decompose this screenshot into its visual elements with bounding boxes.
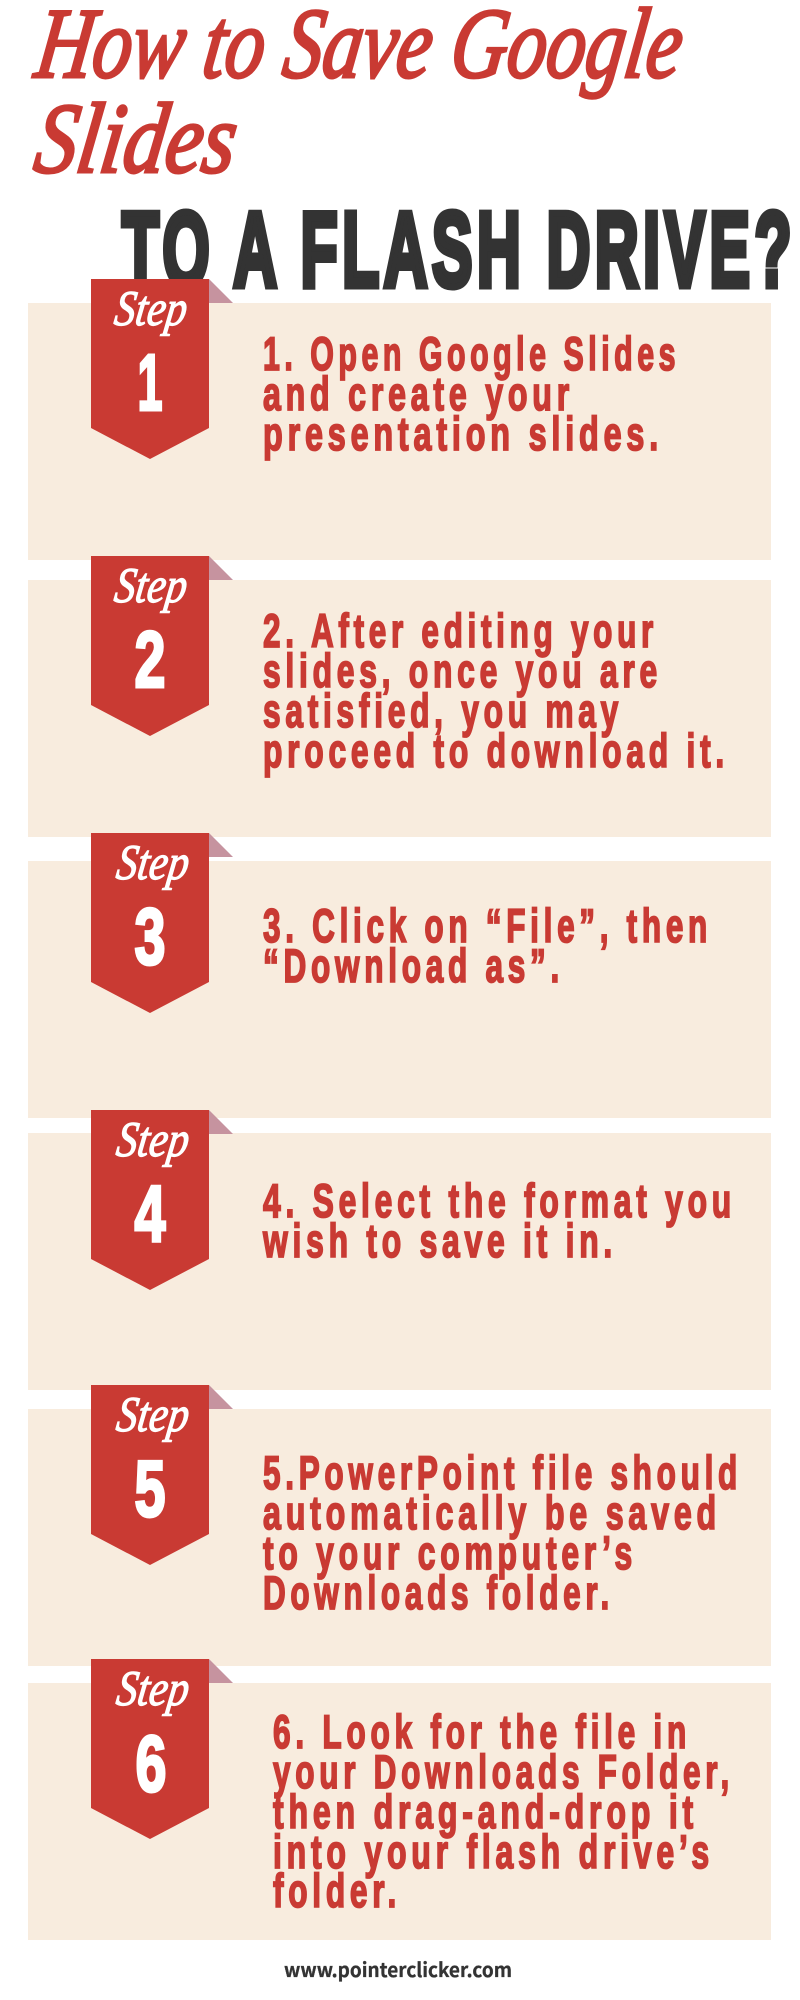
step number: 3	[134, 892, 166, 981]
ribbon fold	[209, 279, 233, 303]
step text	[273, 1705, 734, 1917]
step text	[262, 1174, 736, 1267]
step text	[263, 604, 729, 777]
ribbon	[91, 833, 209, 1013]
panel: step 6	[28, 1659, 771, 1940]
step text: satisfied, you may	[263, 684, 623, 737]
panel background	[28, 1133, 771, 1390]
ribbon label: Step	[111, 280, 191, 336]
ribbon fold	[209, 1659, 233, 1683]
panel background	[28, 861, 771, 1118]
step text: to your computer’s	[263, 1526, 637, 1579]
step number: 4	[134, 1169, 166, 1258]
title	[28, 0, 796, 309]
footer url: www.pointerclicker.com	[284, 1954, 512, 1983]
ribbon label: Step	[113, 1660, 193, 1716]
step text	[263, 899, 712, 992]
title script line 2: Slides	[29, 82, 245, 194]
panel: step 3	[28, 833, 771, 1118]
panel background	[28, 1683, 771, 1940]
panel: step 4	[28, 1110, 771, 1390]
step text: and create your	[263, 367, 574, 420]
step number: 6	[136, 1719, 166, 1808]
panel background	[28, 1409, 771, 1666]
step text: wish to save it in.	[262, 1214, 617, 1267]
panel: step 1	[28, 279, 771, 560]
step number: 5	[134, 1444, 166, 1533]
ribbon label: Step	[113, 834, 193, 890]
panel: step 2	[28, 556, 771, 837]
panel: step 5	[28, 1385, 771, 1666]
ribbon	[91, 279, 209, 459]
ribbon label: Step	[113, 1111, 193, 1167]
step text	[263, 327, 680, 460]
panel background	[28, 580, 771, 837]
ribbon	[91, 1110, 209, 1290]
step text: “Download as”.	[263, 939, 564, 992]
step text: Downloads folder.	[263, 1566, 614, 1619]
ribbon fold	[209, 1385, 233, 1409]
step number: 2	[134, 615, 166, 704]
step number: 1	[138, 338, 162, 427]
ribbon label: Step	[113, 1386, 193, 1442]
ribbon fold	[209, 833, 233, 857]
ribbon label: Step	[111, 557, 191, 613]
ribbon	[91, 556, 209, 736]
panel background	[28, 303, 771, 560]
ribbon fold	[209, 1110, 233, 1134]
step text: folder.	[273, 1864, 401, 1917]
ribbon	[91, 1659, 209, 1839]
ribbon	[91, 1385, 209, 1565]
ribbon fold	[209, 556, 233, 580]
step text	[263, 1446, 742, 1619]
